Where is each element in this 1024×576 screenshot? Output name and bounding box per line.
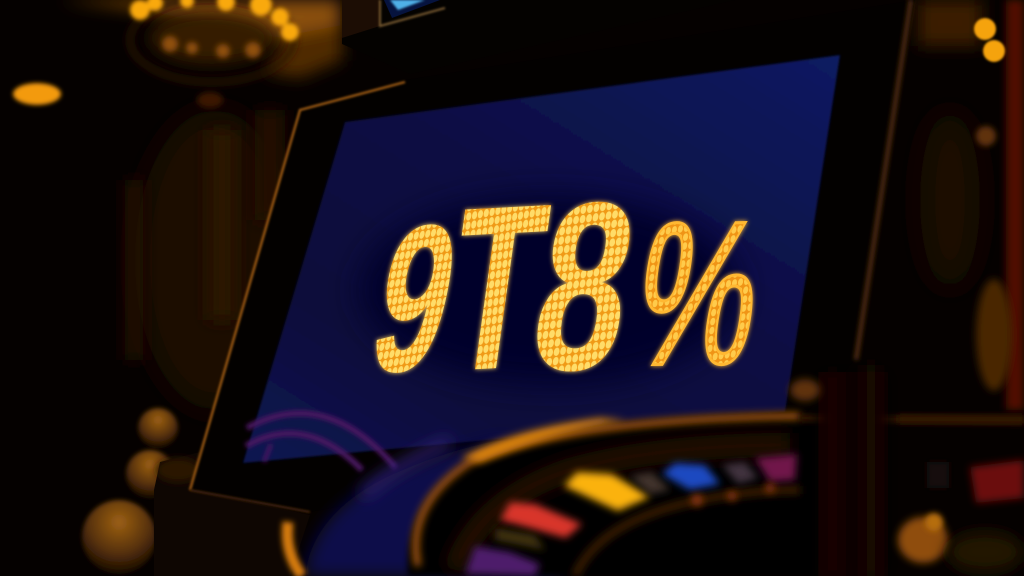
right table sign (898, 415, 1024, 503)
percent sign: % (621, 179, 777, 410)
yellow pocket (564, 472, 650, 511)
orange lower arc (287, 522, 302, 576)
decorative spheres (82, 408, 178, 574)
purple highlight (362, 442, 450, 495)
top unit (342, 0, 735, 74)
olive pocket (495, 528, 545, 550)
ceiling glow (60, 0, 342, 78)
inner ring (575, 490, 800, 576)
orange dots (691, 483, 775, 506)
purple pocket (465, 546, 540, 576)
display screen (243, 55, 840, 463)
digit 8: 8 (518, 152, 651, 421)
wheel blue rim (305, 440, 560, 576)
roulette wheel (287, 412, 1024, 576)
chandelier (130, 0, 299, 108)
wall lamp (13, 83, 61, 105)
purple arcs on screen (246, 413, 396, 470)
orange rim (416, 416, 800, 566)
dark haze behind digits (360, 195, 740, 385)
wheel body (407, 412, 815, 576)
magenta pocket (755, 454, 797, 482)
foreground blurred post (790, 365, 888, 576)
red pocket (500, 502, 582, 538)
letter T: T (434, 154, 560, 421)
grey pockets (630, 472, 670, 494)
monitor bezel (190, 0, 915, 512)
digit 9: 9 (354, 181, 476, 417)
blue pocket (662, 463, 720, 490)
right side lights and curtain (918, 0, 1024, 410)
LED readout: 9T8 % (354, 152, 777, 421)
foreground amber lights (898, 513, 1023, 572)
pedestal (154, 452, 310, 576)
